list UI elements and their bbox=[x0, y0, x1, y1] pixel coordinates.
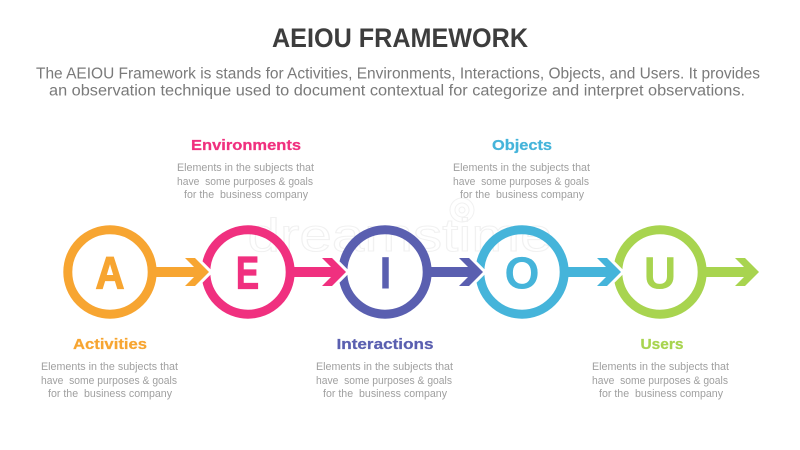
text block: Users: Users bbox=[640, 336, 684, 353]
step U: circle: U bbox=[644, 248, 676, 298]
watermark bbox=[248, 198, 552, 261]
text block: Objects: Elements in the subjects that bbox=[453, 162, 590, 174]
text block: Users: have some purposes & goals bbox=[592, 375, 729, 387]
text block: Interactions: for the business company bbox=[323, 388, 448, 400]
text block: Environments: Elements in the subjects that bbox=[177, 162, 314, 174]
text block: Objects: for the business company bbox=[460, 189, 585, 201]
arrow: A to E bbox=[152, 258, 209, 286]
step I: circle bbox=[343, 230, 427, 314]
text block: Users bbox=[592, 336, 729, 400]
step E: circle: E bbox=[236, 248, 259, 298]
text block: Activities bbox=[41, 336, 178, 400]
text block: Activities: have some purposes & goals bbox=[41, 375, 178, 387]
subtitle bbox=[36, 66, 760, 100]
text block: Activities: for the business company bbox=[48, 388, 173, 400]
subtitle: an observation technique used to document contextual for categorize and interpret observations. bbox=[49, 82, 745, 100]
text block: Interactions: have some purposes & goals bbox=[316, 375, 453, 387]
text block: Environments: have some purposes & goals bbox=[177, 176, 314, 188]
step E: circle bbox=[206, 230, 290, 314]
text block: Users: for the business company bbox=[599, 388, 724, 400]
text block: Activities: Activities bbox=[73, 336, 147, 353]
step O: circle: O bbox=[504, 248, 540, 298]
step O: circle bbox=[480, 230, 564, 314]
text block: Environments bbox=[177, 137, 314, 201]
arrow: I to O bbox=[427, 258, 483, 286]
arrow: O to U bbox=[564, 258, 621, 286]
step A: circle bbox=[68, 230, 152, 314]
arrow: E to I bbox=[290, 258, 346, 286]
text block: Interactions: Interactions bbox=[336, 336, 434, 353]
text block: Interactions: Elements in the subjects that bbox=[316, 361, 453, 373]
subtitle: The AEIOU Framework is stands for Activities, Environments, Interactions, Objects, and Users. It provides bbox=[36, 66, 760, 82]
text block: Interactions bbox=[316, 336, 453, 400]
text block: Environments: Environments bbox=[191, 137, 301, 154]
text block: Users: Elements in the subjects that bbox=[592, 361, 729, 373]
text block: Objects: Objects bbox=[492, 137, 552, 154]
text block: Environments: for the business company bbox=[184, 189, 309, 201]
step I: circle: I bbox=[379, 248, 392, 298]
arrow: U outgoing bbox=[702, 258, 759, 286]
text block: Activities: Elements in the subjects that bbox=[41, 361, 178, 373]
watermark: dreamstime bbox=[248, 209, 552, 261]
text block: Objects: have some purposes & goals bbox=[453, 176, 590, 188]
step A: circle: A bbox=[96, 248, 124, 298]
title: AEIOU FRAMEWORK bbox=[272, 23, 528, 53]
text block: Objects bbox=[453, 137, 590, 201]
step U: circle bbox=[618, 230, 702, 314]
